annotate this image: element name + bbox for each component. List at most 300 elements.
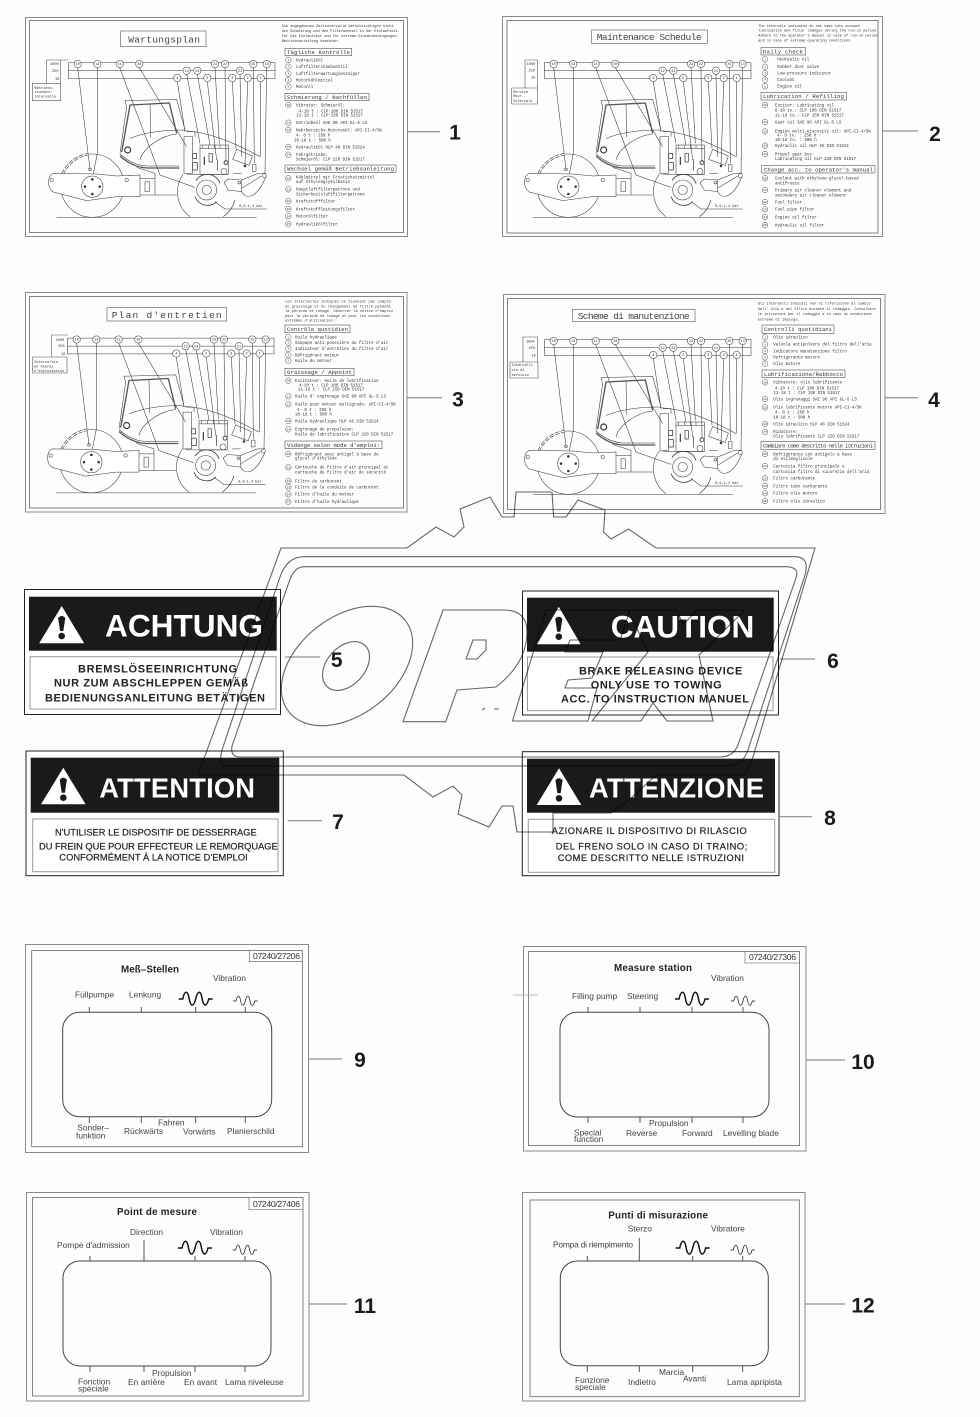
heading: Punti di misurazione (608, 1210, 709, 1221)
notes column: antifreeze (775, 181, 800, 186)
notes column: 12 (763, 130, 767, 133)
notes column: 11 (286, 122, 290, 125)
notes column: Change acc. to operator's manual (764, 166, 874, 173)
notes column: Propel gear box: (775, 152, 814, 157)
notes column: Vibrator: Schmieröl: (296, 103, 345, 108)
notes column (758, 301, 876, 504)
measure point labels: Lama niveleuse (225, 1377, 284, 1387)
service interval box: 10 (531, 76, 535, 80)
diagram callout numbers: 11 (117, 339, 121, 343)
notes column: Réfrigérant avec antigel à base de (295, 452, 379, 457)
notes column: Olio motore (773, 362, 801, 367)
diagram callout numbers: 4 (652, 354, 654, 358)
notes column: 25 (286, 223, 290, 226)
notes column: 2 (764, 66, 766, 69)
diagram callout numbers: 5 (205, 353, 207, 357)
notes column: 14 (286, 428, 290, 431)
letter X (592, 610, 745, 721)
notes column: Cambiare come descritto nelle istruzioni (763, 442, 874, 449)
measure point labels: Indietro (628, 1377, 656, 1387)
title: Wartungsplan: Wartungsplan (128, 34, 200, 45)
machine outline (63, 1012, 272, 1117)
warning label 7: ATTENTION (26, 751, 283, 876)
notes column: die Schmierung und den Filterwechsel in der Einlaufzeit. (282, 29, 400, 34)
diagram callout numbers: 1 (260, 77, 262, 81)
measure point labels (572, 973, 779, 1144)
notes column: glycol d'éthylène (295, 457, 337, 462)
notes column: Hydraulic oil filter (775, 223, 825, 228)
service interval box: Service (513, 90, 528, 95)
notes column: 1 (287, 59, 289, 62)
measure point labels: speciale (575, 1382, 606, 1392)
notes column: 14 (763, 153, 767, 156)
callout 3: 3 (452, 388, 464, 412)
diagram callout numbers: 11 (594, 340, 598, 344)
service interval box: 250 (528, 347, 535, 351)
notes column: 14 (763, 431, 767, 434)
notes column: 25 (763, 500, 767, 503)
black banner (527, 759, 775, 813)
title: Scheme di manutenzione: Scheme di manutenzione (578, 311, 690, 322)
notes column: Mehrbereichs-Motorenöl: API-CI-4/SK (296, 128, 383, 133)
diagram callout numbers: 4 (652, 77, 654, 81)
notes column: Motorölfilter (296, 215, 328, 220)
text box: AZIONARE IL DISPOSITIVO DI RILASCIO (552, 826, 747, 836)
icon: large vibration wave (676, 1241, 710, 1254)
diagram callout numbers: 12 (184, 345, 188, 349)
notes column: Engrenage de propulsion: (295, 428, 354, 433)
notes column: 4 (764, 79, 766, 82)
icon: warning triangle (39, 606, 84, 643)
diagram callout numbers: 25 (727, 340, 731, 344)
panel frame (26, 1192, 309, 1401)
notes column: 11-16 t : CLP 150 DIN 51517 (298, 389, 365, 393)
diagram callout numbers: 20 (613, 63, 617, 67)
measure point labels: Vibration (711, 973, 744, 983)
diagram callout numbers: 0,9-1,4 bar (239, 204, 263, 209)
measure point labels: Funzione (575, 1375, 610, 1385)
diagram callout numbers: 22 (222, 339, 226, 343)
panel frame (524, 946, 806, 1151)
inner ring B (221, 557, 806, 766)
notes column: Olio ingranaggi SAE 90 API GL-5 LS (773, 397, 857, 402)
panel 2: Maintenance Schedule (502, 16, 882, 236)
notes column: Hydraulic oil HLP 46 DIN 51524 (775, 144, 849, 149)
black banner (31, 758, 279, 813)
service interval box: intervalle (34, 94, 56, 100)
heading: Measure station (614, 963, 692, 974)
heading: Point de mesure (117, 1207, 198, 1218)
diagram callout numbers: 5 (206, 77, 208, 81)
panel 2 frame (502, 16, 882, 236)
service interval box: Intervalli (512, 363, 533, 368)
notes column: 23 (286, 208, 290, 211)
service interval box (512, 60, 537, 104)
notes column: Cartuccia filtro principale e (773, 464, 845, 469)
diagram callout numbers: 0,9-1,4 bar (715, 481, 739, 486)
notes column: Réfrigérant moteur (295, 353, 340, 358)
notes column: 3 (764, 72, 766, 75)
notes column: Fuel filter (775, 200, 803, 205)
notes column: Rubber dust valve (777, 65, 820, 70)
measure panel 9: Meß-Stellen (26, 944, 308, 1152)
notes column: Refrigerante motore (773, 356, 821, 361)
measure point labels: spéciale (78, 1384, 109, 1394)
panel 3 frame (26, 292, 407, 512)
notes column: 23 (286, 486, 290, 489)
part number: 07240/27206 (253, 951, 300, 961)
diagram callout numbers: 23 (689, 340, 693, 344)
diagram callout numbers: 3 (231, 77, 233, 81)
diagram callout numbers: 13 (741, 63, 745, 67)
diagram callout numbers: 22 (699, 340, 703, 344)
notes column: 21 (286, 466, 290, 469)
callout 2 (883, 123, 941, 146)
measure point labels: En avant (184, 1377, 218, 1387)
icon: small vibration wave (731, 996, 755, 1005)
diagram callout numbers: 10 (552, 63, 556, 67)
notes column: Excitateur: Huile de lubrification (295, 379, 379, 384)
diagram callout numbers: 1 (259, 353, 261, 357)
measure point labels: Marcia (659, 1367, 684, 1377)
notes column: dell' olio e del filtro durante il rodaggio. Consultare (758, 307, 876, 312)
measure panel 11: Point de mesure (26, 1192, 309, 1401)
icon: small vibration wave (233, 1245, 257, 1254)
service interval box (510, 337, 538, 378)
panel 4 frame (504, 294, 885, 514)
notes column: Filtre d'huile hydraulique (295, 500, 359, 505)
heading: ATTENZIONE (589, 773, 764, 804)
notes column: 22 (286, 200, 290, 203)
notes column: 5 (287, 360, 289, 363)
gear outer outline (198, 492, 815, 832)
measure panel 12: Punti di misurazione (522, 1192, 805, 1401)
notes column: 10-18 t : 500 h (295, 413, 332, 418)
notes column: Luftfilterwartungsanzeiger (296, 72, 360, 77)
notes column: 25 (763, 224, 767, 227)
notes column: 10-18 t : 500 h (773, 415, 811, 420)
text box: NUR ZUM ABSCHLEPPEN GEMÄß (54, 677, 248, 690)
measure point labels: Direction (130, 1227, 163, 1237)
letter P (403, 610, 527, 722)
measure point labels (553, 1224, 782, 1392)
notes column: Filtro olio idraulico (773, 499, 825, 504)
callout 2: 2 (929, 123, 941, 146)
service interval box: Hour (513, 94, 522, 99)
panel 1 frame (26, 18, 408, 236)
diagram callout numbers: 13 (741, 340, 745, 344)
measure point labels: Reverse (626, 1128, 658, 1138)
notes column: Graissage / Appoint (287, 369, 352, 376)
service interval box: 250 (528, 70, 535, 74)
measure point labels: Fonction (78, 1376, 110, 1386)
callout 10: 10 (851, 1051, 875, 1074)
text box (528, 819, 775, 872)
measure point labels: Levelling blade (723, 1128, 779, 1138)
notes column: 24 (286, 215, 290, 218)
roller diagram (49, 60, 275, 217)
diagram callout numbers: 20 (136, 339, 140, 343)
notes column: Motorkühlmittel (296, 78, 333, 83)
notes column: du graissage et du changement de filtre pendant (285, 304, 391, 309)
service interval box: Intervalles (34, 360, 58, 365)
callout 3 (407, 388, 464, 412)
notes column: 4 (287, 354, 289, 357)
notes column: Hydrauliköl (296, 58, 324, 63)
notes column: 1 (287, 336, 289, 339)
measure point labels: Lenkung (129, 989, 161, 999)
text box: BRAKE RELEASING DEVICE (579, 665, 742, 677)
diagram callout numbers: 14 (94, 339, 98, 343)
notes column: Fahrgetriebe: (296, 153, 328, 158)
notes column: Tägliche Kontrolle (287, 49, 350, 56)
notes column: 10 (286, 380, 290, 383)
notes column: 4-10 t : CLP 100 DIN 51517 (299, 384, 363, 388)
notes column: 2 (287, 66, 289, 69)
text box: DEL FRENO SOLO IN CASO DI TRAINO; (556, 841, 747, 851)
notes column: secondary air cleaner element (775, 193, 847, 198)
measure point labels: Pompe d'admission (57, 1240, 130, 1250)
service interval box: 250 (58, 345, 64, 349)
warning label 6: CAUTION (522, 591, 778, 715)
icon: large vibration wave (179, 992, 213, 1005)
notes column: Filtro olio motore (773, 492, 818, 497)
service interval box: servizio (512, 373, 529, 378)
notes column: 3 (764, 350, 766, 353)
diagram callout numbers (552, 63, 745, 209)
part number: 07240/27306 (749, 952, 796, 962)
notes column: 8-10 to.: CLP 100 DIN 51517 (775, 109, 842, 113)
notes column: Filtro tubo carburante (773, 484, 828, 489)
icon: warning triangle (41, 768, 86, 804)
black banner (527, 598, 774, 652)
notes column: 4- 8 t : 250 h (775, 410, 810, 415)
diagram callout numbers: 24 (671, 347, 675, 351)
diagram callout numbers: 1 (736, 77, 738, 81)
notes column: 22 (763, 477, 767, 480)
panel 3: Plan d'entretien (26, 292, 407, 512)
panel 4: Scheme di manutenzione (504, 294, 885, 514)
notes column: Huile hydraulique HLP 46 DIN 51524 (295, 419, 379, 424)
black banner (29, 597, 277, 651)
label frame (26, 751, 283, 876)
notes column: The intervals indicated do not take into account (758, 24, 860, 29)
notes column: Filtre de la conduite de carburant (295, 486, 379, 491)
notes column: Daily check (763, 48, 804, 55)
notes column: Hydraulikölfilter (296, 222, 338, 227)
diagram callout numbers: 5 (682, 77, 684, 81)
diagram callout numbers: 3 (230, 353, 232, 357)
test point ticks (588, 1007, 743, 1123)
service interval box: stunden- (34, 90, 52, 95)
test point ticks (89, 1007, 245, 1123)
notes column: 4- 8 t : 250 h (296, 134, 331, 139)
notes column: 21 (763, 189, 767, 192)
roller diagram (48, 336, 274, 493)
text box: BREMSLÖSEEINRICHTUNG (78, 662, 237, 675)
diagram callout numbers (76, 63, 269, 209)
callout 1: 1 (449, 121, 461, 144)
service interval box: 1000 (50, 63, 59, 67)
notes column: Lubricating oil CLP 220 DIN 51517 (775, 157, 857, 162)
notes column: Olio lubrificante motore API-CI-4/SK (773, 406, 862, 411)
notes column: Primary air cleaner element and (775, 188, 852, 193)
notes column: 14 (286, 154, 290, 157)
warning label 8: ATTENZIONE (522, 752, 779, 876)
text box: N'UTILISER LE DISPOSITIF DE DESSERRAGE (55, 828, 257, 838)
measure point labels: Lama apripista (727, 1377, 782, 1387)
measure point labels: Vibratore (711, 1224, 745, 1234)
notes column: Engine oil (777, 85, 802, 90)
notes column: 20 (763, 177, 767, 180)
notes column: 24 (286, 493, 290, 496)
notes column: 4- 8 t : 250 h (297, 408, 332, 413)
callout 11 (309, 1295, 376, 1318)
notes column: 22 (286, 480, 290, 483)
inner ring A (232, 567, 797, 757)
text box: COME DESCRITTO NELLE ISTRUZIONI (558, 853, 744, 863)
notes column: 2 (764, 343, 766, 346)
notes column: 2 (287, 342, 289, 345)
notes column: Filtro carburante (773, 477, 816, 482)
notes column (285, 300, 396, 505)
notes column: 24 (763, 492, 767, 495)
callout 9: 9 (354, 1049, 366, 1072)
notes column: 13 (286, 146, 290, 149)
notes column: Betriebsanleitung beachten. (282, 39, 340, 44)
notes column: 10 (286, 104, 290, 107)
diagram callout numbers: 25 (250, 339, 254, 343)
measure point labels: Vibration (210, 1227, 243, 1237)
diagram callout numbers: 22 (699, 63, 703, 67)
title: Maintenance Schedule: Maintenance Schedule (597, 32, 702, 43)
notes column: and in case of extreme operating conditions. (758, 38, 852, 43)
notes column: Huile du moteur (295, 359, 332, 364)
notes column: Coolant with ethylene-glycol-based (775, 177, 859, 182)
notes column: Soupape anti-poussière du filtre d'air (295, 341, 389, 346)
notes column: 24 (763, 216, 767, 219)
notes column: Controlli quotidiani (764, 326, 833, 333)
notes column: Indicatore manutenzione filtro (773, 349, 848, 354)
notes column: 11 (763, 121, 767, 124)
notes column: Luftfilterstaubventil (296, 65, 348, 70)
service interval box: en heures (34, 364, 53, 370)
part number: 07240/27406 (253, 1199, 300, 1209)
notes column: 10-18 t : 500 h (294, 138, 331, 143)
service interval box: d'exploitation (34, 369, 64, 374)
notes column: auf Äthylenglykolbasis (296, 180, 351, 185)
diagram callout numbers: 10 (75, 339, 79, 343)
icon: small vibration wave (233, 996, 258, 1005)
notes column: 23 (763, 485, 767, 488)
notes column: 4- 8 to. : 250 h (777, 134, 817, 139)
measure point labels: Füllpumpe (75, 989, 114, 999)
service interval box (33, 335, 68, 374)
notes column: Wechsel gemäß Betriebsanleitung (287, 166, 394, 173)
measure point labels: Propulsion (152, 1368, 192, 1378)
heading: Meß–Stellen (121, 965, 179, 976)
service interval box (32, 60, 68, 101)
notes column: Hydraulic oil (777, 58, 810, 63)
callout 11: 11 (354, 1295, 376, 1318)
notes column: Filtre d'huile du moteur (295, 493, 355, 498)
letter E (512, 610, 630, 721)
measure point labels: function (574, 1134, 604, 1144)
text box (33, 819, 278, 872)
diagram callout numbers: 11 (594, 63, 598, 67)
notes column: Olio lubrificante CLP 220 DIN 51517 (773, 434, 860, 439)
diagram callout numbers: 24 (195, 70, 199, 74)
diagram callout numbers: 23 (689, 63, 693, 67)
notes column: Die angegebenen Zeitintervalle berücksichtigen nicht (282, 24, 394, 29)
text box: BEDIENUNGSANLEITUNG BETÄTIGEN (45, 692, 265, 705)
notes column: 12 (286, 129, 290, 132)
measure point labels: En arrière (128, 1377, 165, 1387)
notes column: 20 (286, 453, 290, 456)
notes column: 11 (763, 398, 767, 401)
callout 1 (408, 121, 461, 144)
icon: large vibration wave (178, 1241, 212, 1254)
diagram callout numbers: 21 (238, 70, 242, 74)
notes column: 4 (287, 79, 289, 82)
text box: CONFORMÉMENT À LA NOTICE D'EMPLOI (59, 853, 248, 863)
watermark: gear logo outline (198, 492, 815, 832)
diagram callout numbers (75, 339, 268, 484)
measure point labels: Special (574, 1128, 602, 1138)
diagram callout numbers: 13 (265, 63, 269, 67)
test point ticks (587, 1238, 743, 1372)
notes column: Huile d' engrenage SAE 90 API GL-5 LS (295, 395, 386, 400)
callout 9 (308, 1049, 366, 1072)
roller diagram (525, 60, 751, 217)
notes column: 1 (764, 58, 766, 61)
notes column: 22 (763, 201, 767, 204)
measure point labels: Forward (682, 1128, 713, 1138)
diagram callout numbers: 2 (723, 77, 725, 81)
measure point labels: Filling pump (572, 991, 617, 1001)
notes column: Für die Einlaufzeit und für extreme Einsatzbedingungen (282, 34, 397, 39)
diagram callout numbers: 21 (714, 70, 718, 74)
notes column: 10-18 to. : 500 h (775, 138, 817, 143)
notes column: 11 (286, 395, 290, 398)
service interval box: 1000 (526, 63, 535, 67)
text box: DU FREIN QUE POUR EFFECTEUR LE REMORQUAGE (39, 841, 278, 851)
measure point labels: Sonder– (77, 1123, 109, 1133)
diagram callout numbers: 12 (661, 347, 665, 351)
notes column: Schmierung / Nachfüllen (287, 94, 367, 101)
diagram callout numbers: 14 (571, 63, 575, 67)
text box (30, 657, 276, 709)
notes column: Schmieröl: CLP 220 DIN 51517 (296, 157, 365, 162)
notes column (282, 24, 400, 227)
notes column: 11-18 t : CLP 150 DIN 51517 (296, 115, 363, 119)
diagram callout numbers: 24 (194, 345, 198, 349)
service interval box: Intervals (513, 99, 532, 104)
notes column: Olio idraulico HLP 46 DIN 51524 (773, 422, 850, 427)
diagram callout numbers (552, 340, 745, 486)
diagram callout numbers: 0,9-1,4 bar (715, 204, 739, 209)
diagram callout numbers: 22 (223, 63, 227, 67)
notes column: 25 (286, 501, 290, 504)
notes column: Contrôle quotidien (287, 326, 348, 333)
notes column: 13 (763, 423, 767, 426)
callout 6: 6 (827, 650, 839, 673)
notes column: 20 (286, 177, 290, 180)
notes column: Cartouche du filtre d'air principal et (295, 466, 389, 471)
notes column: Motoröl (296, 85, 314, 90)
notes column: estreme di impiego. (758, 317, 800, 322)
notes column: Gli intervalli indicati non si riferiscono al cambio (758, 301, 871, 306)
